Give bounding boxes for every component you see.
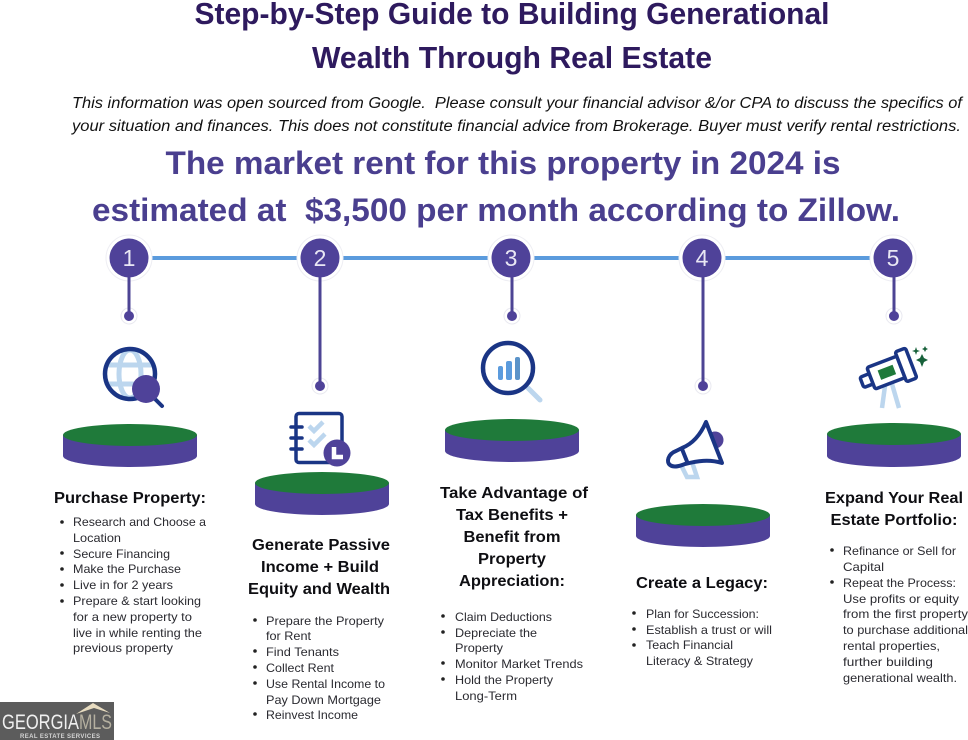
step 5 heading [825,490,963,529]
step 2 heading: Equity and Wealth [248,581,390,598]
icon: megaphone [668,422,724,477]
platform 4 [636,504,770,547]
step 3 heading: Appreciation: [459,573,565,590]
step 5 heading: Expand Your Real [825,490,963,507]
step 3 marker [488,235,534,324]
market rent headline [92,145,900,228]
step 5 list: to purchase additional [843,623,968,637]
step 3 list: Depreciate the [455,626,537,640]
step 1 list: Prepare & start looking [73,594,201,608]
logo: Georgia MLS: GEORGIA [2,711,79,734]
step 2 list: Prepare the Property [266,614,384,628]
timeline connector [150,256,872,260]
step 5 list: Repeat the Process: [843,576,956,590]
step 2 marker: 2 [314,245,326,271]
step 4 list [632,607,772,668]
step 3 list: Long-Term [455,689,517,703]
market rent headline: The market rent for this property in 2024 is [166,145,840,181]
step 1 list: Secure Financing [73,547,170,561]
step 1 marker [106,235,152,324]
icon: telescope with sparkles [856,346,928,408]
step 3 list: Monitor Market Trends [455,657,583,671]
step 1 list [60,515,206,655]
step 2 marker [297,235,343,394]
title [194,0,830,75]
market rent headline: estimated at $3,500 per month according to Zillow. [92,192,900,228]
logo: Georgia MLS: MLS [79,711,112,734]
step 3 heading: Property [478,551,546,568]
step 5 list: Use profits or equity [843,592,959,606]
step 5 heading: Estate Portfolio: [830,512,958,529]
icon: magnifier with bar chart [483,343,540,400]
step 3 heading: Benefit from [464,529,560,546]
step 4 marker [679,235,725,394]
step 2 list: Collect Rent [266,661,335,675]
step 1 list: for a new property to [73,610,192,624]
step 5 list [830,544,968,685]
step 3 list: Hold the Property [455,673,553,687]
step 5 marker: 5 [887,245,899,271]
step 3 marker: 3 [505,245,517,271]
step 4 list: Establish a trust or will [646,623,772,637]
step 5 list: generational wealth. [843,671,957,685]
title: Wealth Through Real Estate [312,40,712,75]
disclaimer text [71,95,964,135]
step 4 list: Teach Financial [646,638,733,652]
step 2 list: Find Tenants [266,645,339,659]
step 3 list: Property [455,641,503,655]
icon: notebook checklist with clock [291,414,350,466]
platform 3 [445,419,579,462]
step 1 heading: Purchase Property: [54,490,206,507]
step 2 list [253,614,385,722]
step 2 list: for Rent [266,629,312,643]
step 5 list: further building [843,655,933,669]
step 1 marker: 1 [123,245,135,271]
step 2 list: Pay Down Mortgage [266,693,381,707]
step 1 list: Research and Choose a [73,515,206,529]
step 1 list: Location [73,531,121,545]
step 2 heading: Generate Passive [252,537,390,554]
disclaimer text: your situation and finances. This does not constitute financial advice from Brokerage. Buyer must verify rental restrictions. [71,118,961,135]
platform 5 [827,423,961,467]
icon: globe with magnifier [105,349,162,406]
step 2 list: Reinvest Income [266,708,358,722]
step 3 heading: Take Advantage of [440,485,589,502]
logo: Georgia MLS [0,702,114,740]
step 2 list: Use Rental Income to [266,677,385,691]
logo: Georgia MLS: REAL ESTATE SERVICES [20,734,100,740]
step 4 list: Literacy & Strategy [646,654,753,668]
step 4 list: Plan for Succession: [646,607,759,621]
step 3 list: Claim Deductions [455,610,552,624]
step 4 marker: 4 [696,245,709,271]
step 1 list: Live in for 2 years [73,578,173,592]
step 3 list [441,610,583,703]
step 5 list: rental properties, [843,639,940,653]
step 3 heading: Tax Benefits + [456,507,568,524]
disclaimer text: This information was open sourced from Google. Please consult your financial advisor &/or CPA to discuss the specifics of [72,95,964,112]
step 1 list: live in while renting the [73,626,202,640]
step 2 heading: Income + Build [261,559,379,576]
platform 1 [63,424,197,467]
step 5 list: from the first property [843,607,968,621]
step 5 list: Refinance or Sell for [843,544,956,558]
step 3 heading [440,485,589,590]
step 4 heading: Create a Legacy: [636,575,768,592]
step 5 marker [870,235,916,324]
step 2 heading [248,537,390,598]
platform 2 [255,472,389,515]
step 1 list: Make the Purchase [73,562,181,576]
step 5 list: Capital [843,560,884,574]
step 1 list: previous property [73,641,173,655]
